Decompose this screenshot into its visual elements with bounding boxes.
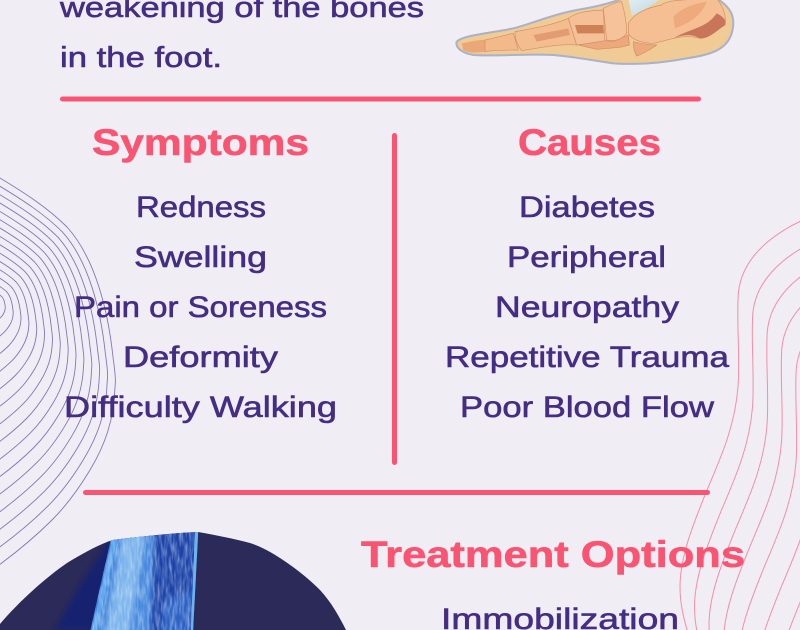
causes list: Repetitive Trauma (445, 341, 729, 374)
icon: foot bones illustration (456, 0, 733, 64)
divider: bottom (83, 490, 710, 495)
panel: causes (445, 121, 729, 424)
panel: symptoms (64, 121, 337, 424)
decorative contours: left purple (0, 175, 115, 568)
causes list (445, 191, 729, 424)
symptoms list: Difficulty Walking (64, 391, 337, 424)
heading: causes: Causes (518, 121, 661, 163)
divider: vertical (392, 133, 397, 465)
causes list: Neuropathy (495, 291, 679, 324)
panel: treatment options (361, 533, 745, 630)
symptoms list: Deformity (123, 341, 278, 374)
x-ray image (0, 525, 350, 630)
symptoms list: Pain or Soreness (74, 291, 327, 324)
decorative contours: right pink (680, 210, 800, 630)
intro text: in the foot. (60, 42, 222, 74)
causes list: Poor Blood Flow (460, 391, 714, 424)
causes list: Peripheral (507, 241, 666, 274)
divider: top (60, 96, 701, 102)
symptoms list: Swelling (134, 241, 267, 274)
heading: symptoms: Symptoms (92, 121, 309, 163)
symptoms list (64, 191, 337, 424)
causes list: Diabetes (519, 191, 655, 224)
intro text (59, 0, 424, 74)
heading: treatment options: Treatment Options (361, 533, 745, 575)
symptoms list: Redness (136, 191, 266, 224)
